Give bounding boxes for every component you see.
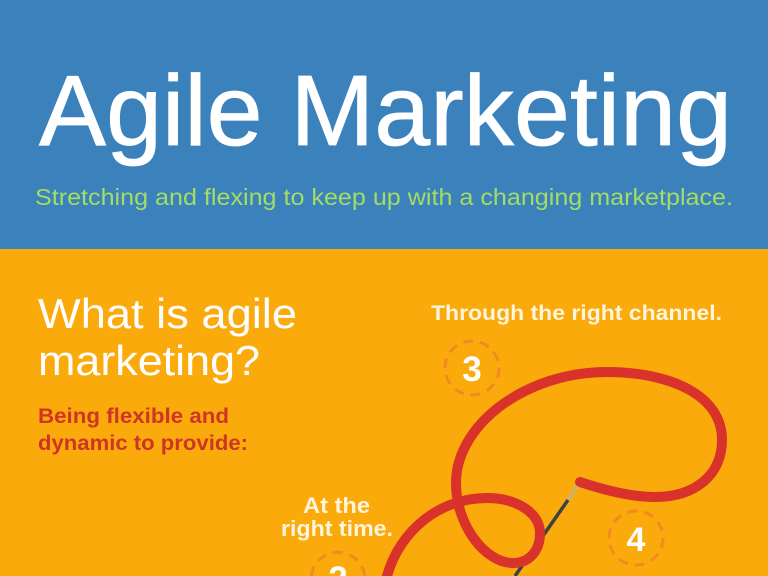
text block: definition: dynamic to provide: <box>38 432 248 455</box>
panel: blue header <box>0 0 768 249</box>
heading: what is agile marketing: marketing? <box>38 337 260 384</box>
label: at the right time <box>281 493 393 541</box>
label: at the right time: At the <box>303 493 370 518</box>
badge: step 2 <box>310 550 366 576</box>
label: through the right channel: Through the right channel. <box>431 301 722 325</box>
badge: step 4: 4 <box>627 521 646 559</box>
title: Agile Marketing <box>39 55 732 167</box>
icon: needle <box>515 485 578 576</box>
heading: what is agile marketing: What is agile <box>38 290 297 337</box>
thread: red curve <box>382 367 727 576</box>
text block: definition <box>38 405 248 455</box>
panel: orange body <box>0 249 768 576</box>
label: at the right time: right time. <box>281 516 393 541</box>
heading: what is agile marketing <box>38 290 297 384</box>
text block: definition: Being flexible and <box>38 405 229 428</box>
badge: step 3 <box>445 341 499 395</box>
badge: step 4 <box>609 511 663 565</box>
badge: step 3: 3 <box>462 350 482 389</box>
subtitle: Stretching and flexing to keep up with a changing marketplace. <box>35 184 733 210</box>
